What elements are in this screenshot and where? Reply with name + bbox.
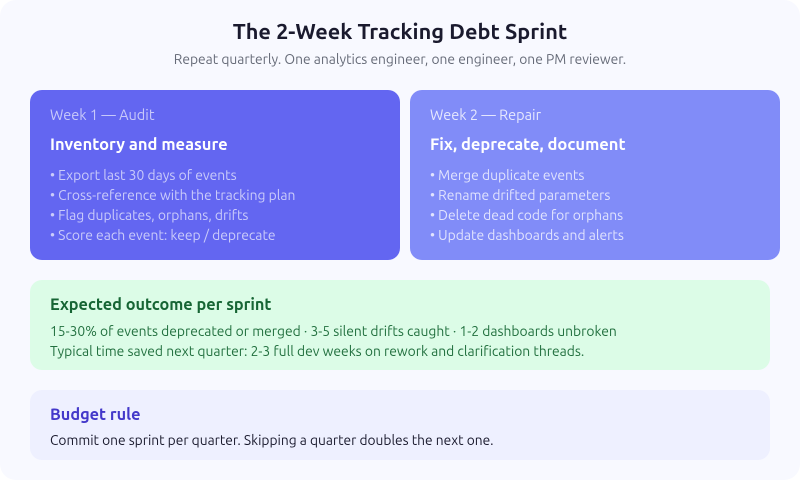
title: The 2-Week Tracking Debt Sprint [233, 20, 567, 44]
week 1 bullets: • Score each event: keep / deprecate [50, 227, 276, 243]
week 2 bullets: • Update dashboards and alerts [430, 227, 624, 243]
outcome text [50, 323, 617, 359]
outcome text: Typical time saved next quarter: 2-3 full dev weeks on rework and clarification threads. [50, 343, 584, 359]
week 2 bullets: • Delete dead code for orphans [430, 207, 623, 223]
panel: expected outcome [30, 280, 770, 370]
week 2 bullets: • Merge duplicate events [430, 167, 584, 183]
week 1 bullets: • Flag duplicates, orphans, drifts [50, 207, 248, 223]
week 2 heading: Fix, deprecate, document [430, 136, 626, 154]
panel: budget rule [30, 390, 770, 460]
outcome text: 15-30% of events deprecated or merged · 3-5 silent drifts caught · 1-2 dashboards unbroken [50, 323, 617, 339]
week 1 heading: Inventory and measure [50, 136, 228, 154]
week 1 bullets: • Cross-reference with the tracking plan [50, 187, 295, 203]
week 2 bullets [430, 167, 624, 243]
week 2 bullets: • Rename drifted parameters [430, 187, 610, 203]
week 1 bullets: • Export last 30 days of events [50, 167, 237, 183]
panel: week 1 audit [30, 90, 400, 260]
budget heading: Budget rule [50, 406, 140, 424]
week 2 label: Week 2 — Repair [430, 106, 541, 123]
panel: week 2 repair [410, 90, 780, 260]
week 1 label: Week 1 — Audit [50, 106, 155, 123]
week 1 bullets [50, 167, 295, 243]
outcome heading: Expected outcome per sprint [50, 296, 271, 314]
subtitle: Repeat quarterly. One analytics engineer, one engineer, one PM reviewer. [174, 51, 626, 67]
budget text: Commit one sprint per quarter. Skipping a quarter doubles the next one. [50, 432, 494, 448]
